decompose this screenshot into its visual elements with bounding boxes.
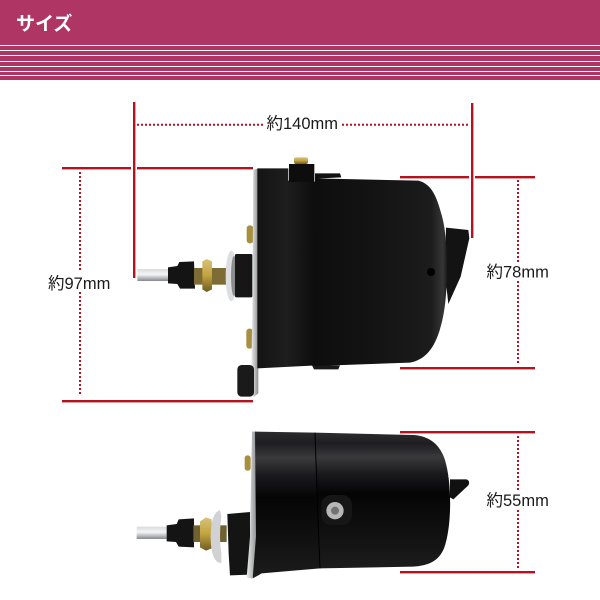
photo: motor top view: [137, 432, 469, 579]
label: 55mm: 約55mm: [486, 491, 549, 510]
label: 97mm: 約97mm: [48, 274, 110, 293]
label: 78mm: 約78mm: [486, 262, 549, 282]
label: 140mm: 約140mm: [266, 114, 338, 133]
photo: motor side view: [137, 157, 469, 397]
header title: サイズ: [16, 12, 72, 35]
header banner: [0, 0, 600, 80]
